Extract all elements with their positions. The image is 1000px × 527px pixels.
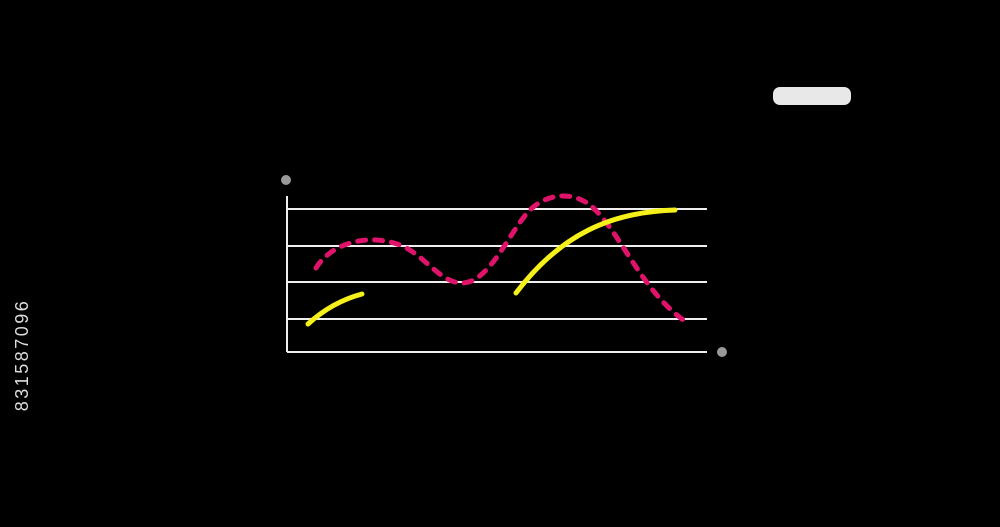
yellow series bbox=[308, 210, 675, 324]
pill label bbox=[773, 87, 851, 105]
line chart bbox=[281, 175, 727, 357]
side id text: 831587096 bbox=[12, 299, 32, 411]
axis end dots bbox=[281, 175, 727, 357]
pink dashed series bbox=[316, 196, 686, 322]
